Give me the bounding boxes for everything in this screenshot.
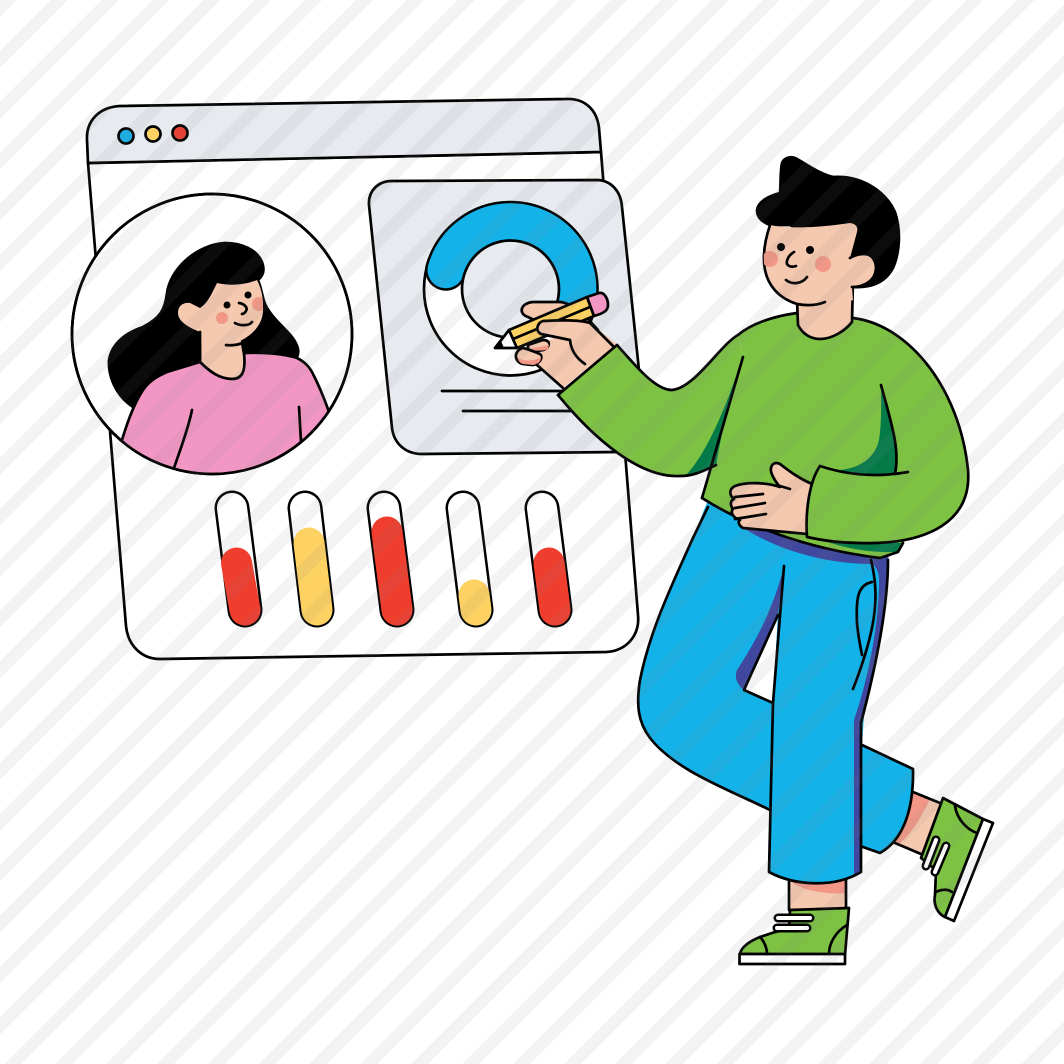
pointing arm sleeve <box>558 335 743 476</box>
woman nose and smile <box>235 303 252 325</box>
woman sweater <box>121 354 329 473</box>
window body <box>88 152 638 659</box>
knee gap <box>744 612 778 703</box>
window header bar <box>87 99 601 163</box>
front shoe <box>740 908 849 964</box>
eyes <box>777 243 814 254</box>
nose and smile <box>786 252 807 283</box>
woman face <box>178 280 263 345</box>
armpit shadow <box>686 359 742 475</box>
palm outlines <box>537 320 613 388</box>
icon: yellow window dot <box>146 126 160 142</box>
right sleeve <box>807 318 968 543</box>
trouser side stripe <box>854 555 888 875</box>
front ankle <box>789 876 846 910</box>
sleeve fold shadow <box>840 385 896 475</box>
man figure <box>495 157 993 964</box>
rear shoe <box>921 798 993 921</box>
pill 2 <box>305 508 317 610</box>
waistband <box>738 500 890 566</box>
ring finger <box>516 348 542 365</box>
pill 5 <box>542 508 555 610</box>
back leg of trousers <box>638 500 913 853</box>
belly hand <box>730 463 812 534</box>
sleeve outlines <box>807 318 968 543</box>
woman jaw and neck lines <box>200 332 244 362</box>
panel: browser window <box>87 99 638 659</box>
pill 3 <box>384 508 397 610</box>
woman cheeks <box>216 297 266 324</box>
palm and front finger <box>537 320 617 388</box>
arm outlines <box>558 335 743 498</box>
head <box>757 157 899 310</box>
pill 1 <box>232 508 245 610</box>
knee gap outline <box>744 615 778 703</box>
rear ankle <box>890 792 940 855</box>
face outline <box>764 225 825 305</box>
bar chart: vertical pills <box>232 508 555 610</box>
inner crease shadow <box>736 566 784 690</box>
avatar outline <box>72 194 352 474</box>
woman hair <box>109 243 298 407</box>
hair <box>757 157 899 287</box>
woman eyes <box>224 292 252 308</box>
ear detail <box>850 254 876 287</box>
face <box>764 223 876 310</box>
pill 4 <box>463 508 476 610</box>
neck <box>797 280 853 339</box>
sweater hem and shoulder lines <box>702 313 903 558</box>
trouser outlines <box>769 560 888 883</box>
icon: red window dot <box>172 126 188 140</box>
avatar: woman in circle <box>72 194 352 480</box>
avatar circle <box>72 194 352 474</box>
panel: donut chart card <box>369 180 645 454</box>
card background <box>369 180 645 454</box>
woman sleeve lines <box>174 407 301 468</box>
text placeholder lines <box>442 391 590 411</box>
cuff of pointing arm <box>558 345 617 395</box>
pencil <box>495 293 608 348</box>
middle finger <box>528 340 550 351</box>
woman neck <box>201 340 244 378</box>
cheeks <box>762 251 831 272</box>
front leg of trousers <box>745 528 888 883</box>
pencil eraser <box>587 293 608 316</box>
drawing hand with pencil <box>495 293 617 395</box>
donut chart <box>424 202 597 376</box>
sweater body <box>702 313 968 558</box>
icon: blue window dot <box>118 128 134 144</box>
back finger <box>522 302 598 340</box>
sweater hem shadow <box>825 541 903 552</box>
